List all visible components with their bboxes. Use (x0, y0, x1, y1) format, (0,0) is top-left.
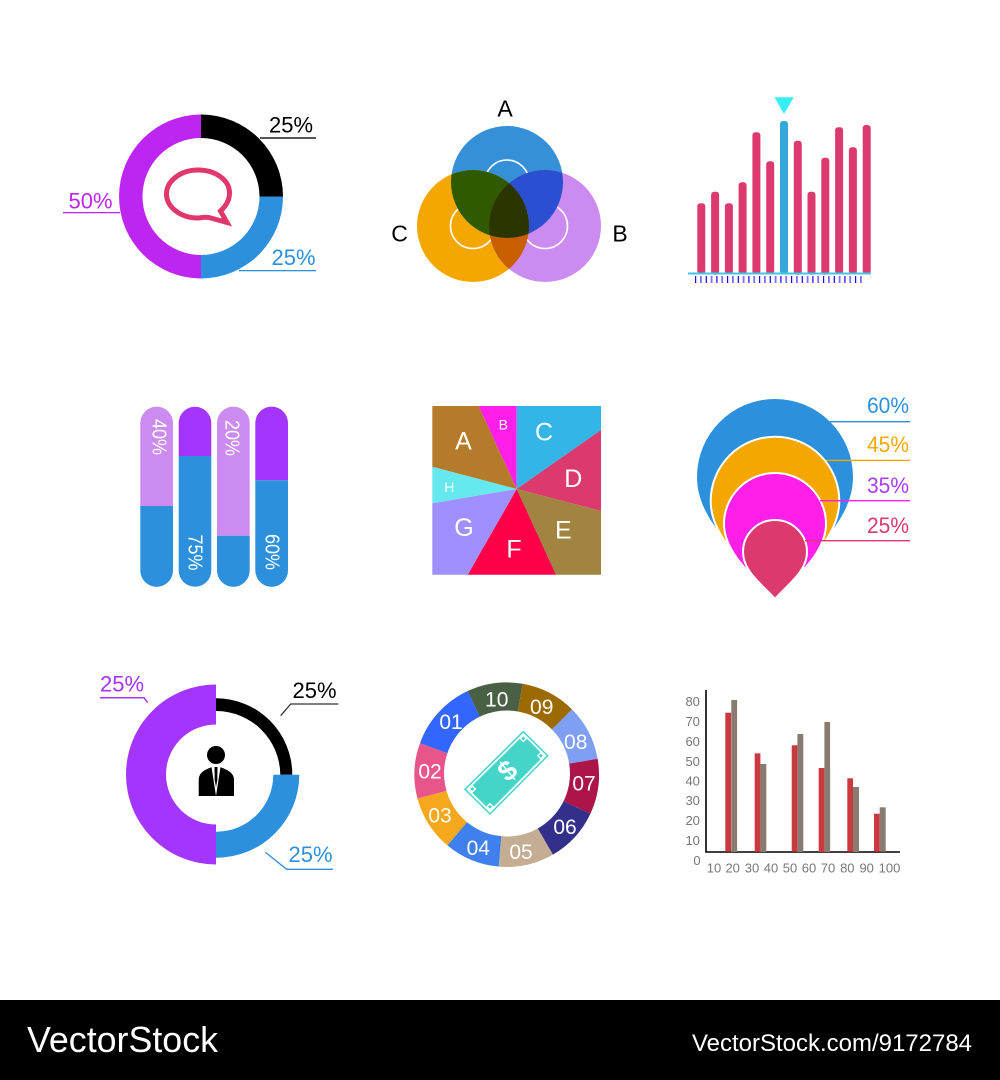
y axis labels: 60 (685, 734, 700, 749)
x axis labels (707, 861, 900, 876)
icon: dollar banknote: $ (491, 754, 524, 788)
label: blue 25% (239, 245, 316, 271)
slice letters (444, 416, 582, 564)
slice letters: C (535, 418, 553, 446)
slice letters: H (444, 479, 454, 495)
overlap: A, B and C (489, 183, 529, 238)
pill bar: 20% (217, 407, 250, 587)
label: blue 25% (265, 842, 333, 869)
x axis labels: 20 (725, 861, 740, 876)
y axis labels: 30 (685, 793, 700, 808)
label: 60%: 60% (867, 393, 909, 418)
label: 35% (820, 473, 910, 501)
label: 35%: 35% (867, 473, 909, 498)
panel: donut chart with speech bubble (63, 113, 316, 278)
label: black 25%: 25% (269, 113, 313, 138)
slice letters: B (499, 416, 508, 432)
panel: stepped donut with person (100, 672, 338, 869)
segment numbers: 06 (553, 816, 577, 839)
y axis labels: 80 (685, 694, 700, 709)
y axis labels: 70 (685, 714, 700, 729)
label: 60% (830, 393, 910, 422)
pin: magenta 35% (724, 473, 826, 599)
inner white rings (450, 160, 568, 248)
slice letters: E (555, 516, 572, 544)
panel: nested map pins (697, 393, 910, 599)
label: B: B (612, 221, 628, 247)
donut segment: blue 25% (201, 196, 283, 278)
label: A: A (497, 96, 513, 122)
axis ticks (695, 276, 856, 283)
overlap: A and C (451, 170, 509, 236)
panel: square pie chart (432, 406, 601, 575)
red bars (725, 713, 880, 852)
icon: person in suit (199, 746, 234, 796)
pin: blue 60% (697, 399, 853, 591)
x axis labels: 90 (859, 861, 874, 876)
panel: bar chart with marker (688, 97, 871, 283)
donut segment: black 25% (201, 114, 283, 196)
label: purple 25%: 25% (100, 672, 144, 697)
venn circle: B (489, 170, 601, 282)
y axis labels: 0 (693, 853, 701, 868)
slice letters: A (455, 428, 472, 456)
pill bar: 20%: 20% (220, 420, 242, 456)
pin: red 25% (743, 520, 807, 599)
footer: watermark bar (0, 1000, 1000, 1080)
ring segments (414, 682, 599, 867)
venn circle: C (417, 170, 529, 282)
overlap: B and C (489, 183, 529, 269)
slice letters: F (506, 536, 522, 564)
label: 45%: 45% (867, 432, 909, 457)
x axis labels: 60 (802, 861, 816, 876)
x axis labels: 40 (764, 861, 778, 876)
footer url text: VectorStock.com/9172784 (692, 1030, 972, 1057)
pill bar: 40% (140, 407, 173, 587)
pill bar: 60%: 60% (260, 534, 282, 570)
segment: blue medium arc (216, 775, 299, 858)
axes (706, 690, 900, 852)
segment numbers: 09 (530, 696, 553, 719)
label: C: C (391, 221, 408, 247)
segment numbers: 10 (485, 688, 508, 712)
segment numbers (418, 688, 596, 864)
pill bar: 75%: 75% (184, 534, 206, 571)
x axis labels: 80 (840, 861, 855, 876)
marker triangle (774, 97, 794, 114)
gray bars (731, 700, 886, 852)
y axis labels: 50 (685, 754, 700, 769)
slice letters: D (564, 465, 582, 493)
segment numbers: 03 (428, 804, 452, 828)
bars (697, 125, 871, 275)
venn circle: A (451, 126, 563, 238)
segment numbers: 01 (439, 711, 463, 734)
slices (432, 406, 601, 575)
y axis labels: 40 (685, 774, 700, 789)
y axis labels: 20 (685, 813, 700, 828)
x axis labels: 30 (745, 861, 759, 876)
label: blue 25%: 25% (272, 245, 316, 270)
overlap: A and B (489, 170, 563, 236)
pin: orange 45% (711, 437, 839, 595)
label: 25% (805, 513, 910, 541)
label: blue 25%: 25% (288, 842, 332, 867)
label: purple 50%: 50% (68, 188, 112, 213)
segment numbers: 04 (467, 837, 490, 860)
donut segment: purple 50% (119, 114, 201, 278)
slice letters: G (454, 514, 474, 542)
segment: black thin arc (216, 698, 292, 775)
segment numbers: 02 (418, 760, 442, 784)
pill bar: 40%: 40% (148, 419, 170, 455)
icon: speech bubble (166, 170, 230, 222)
y axis labels (685, 694, 701, 868)
pill bar: 60% (255, 407, 288, 587)
segment numbers: 07 (572, 772, 596, 796)
panel: venn diagram (391, 96, 628, 282)
panel: grouped bar chart (685, 690, 900, 876)
y axis labels: 10 (685, 833, 700, 848)
pill bar: 75% (179, 407, 211, 587)
footer logo text: VectorStock (27, 1019, 219, 1060)
axis line (688, 272, 871, 274)
segment: purple half ring (126, 684, 216, 864)
panel: vertical pill bars (140, 407, 288, 587)
label: 25%: 25% (867, 513, 909, 538)
label: 45% (826, 432, 910, 461)
segment numbers: 05 (509, 841, 533, 864)
segment numbers: 08 (564, 731, 587, 754)
panel: ten segment ring with money icon (414, 682, 599, 867)
x axis labels: 10 (707, 861, 721, 876)
x axis labels: 100 (879, 861, 900, 876)
icon: dollar banknote (465, 732, 548, 814)
label: black 25%: 25% (292, 678, 336, 703)
ring centre hole (444, 710, 570, 836)
highlighted bar (780, 121, 788, 274)
x axis labels: 50 (783, 861, 797, 876)
label: black 25% (281, 678, 338, 716)
x axis labels: 70 (821, 861, 835, 876)
